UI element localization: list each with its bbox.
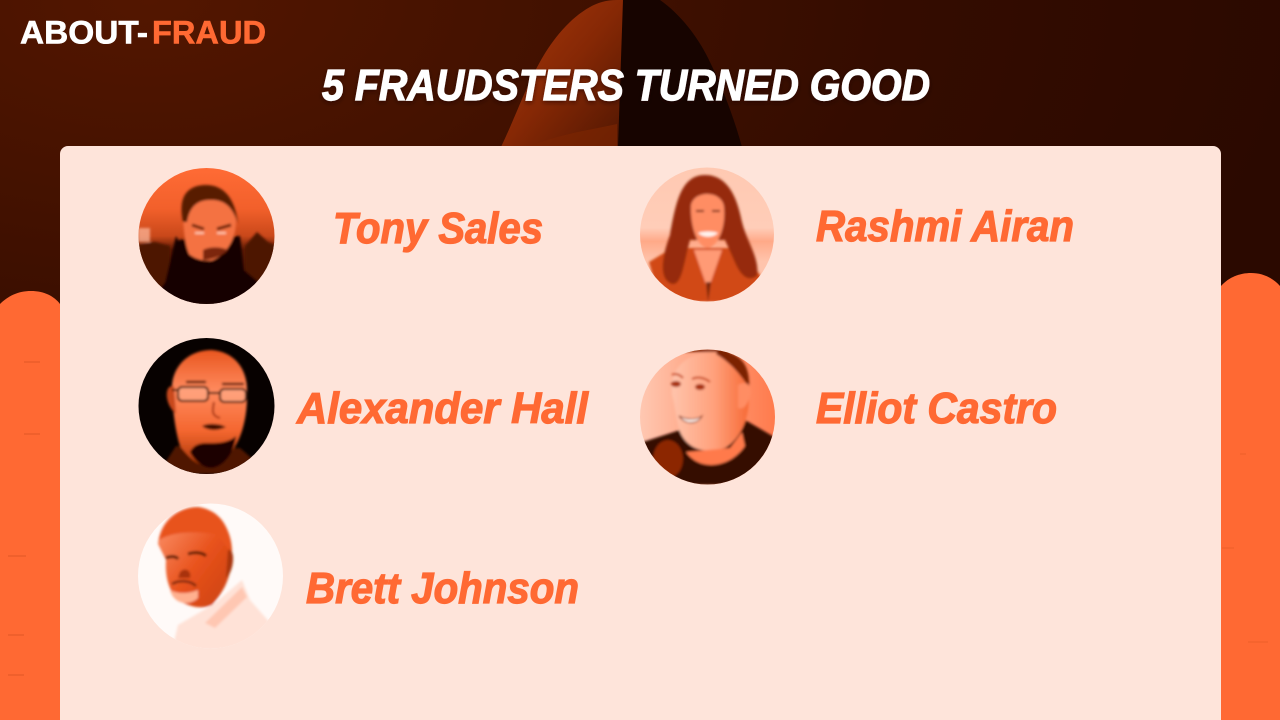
name: Alexander Hall: Alexander Hall <box>296 384 589 433</box>
name: Tony Sales: Tony Sales <box>333 204 543 253</box>
portrait: Tony Sales <box>138 168 275 304</box>
name: Rashmi Airan: Rashmi Airan <box>816 202 1074 251</box>
left side pill <box>0 291 60 720</box>
portrait: Elliot Castro <box>640 349 776 485</box>
name: Brett Johnson: Brett Johnson <box>306 564 579 613</box>
main panel <box>60 146 1221 720</box>
right side pill <box>1221 273 1280 720</box>
name: Elliot Castro: Elliot Castro <box>816 384 1057 433</box>
portrait: Rashmi Airan <box>640 167 774 302</box>
logo word: about: ABOUT- <box>20 14 148 50</box>
logo word: fraud: FRAUD <box>152 14 266 50</box>
title: 5 FRAUDSTERS TURNED GOOD <box>322 61 930 110</box>
hooded figure <box>501 0 742 147</box>
portrait: Brett Johnson <box>138 503 283 650</box>
portrait: Alexander Hall <box>138 338 275 474</box>
logo <box>20 14 266 50</box>
